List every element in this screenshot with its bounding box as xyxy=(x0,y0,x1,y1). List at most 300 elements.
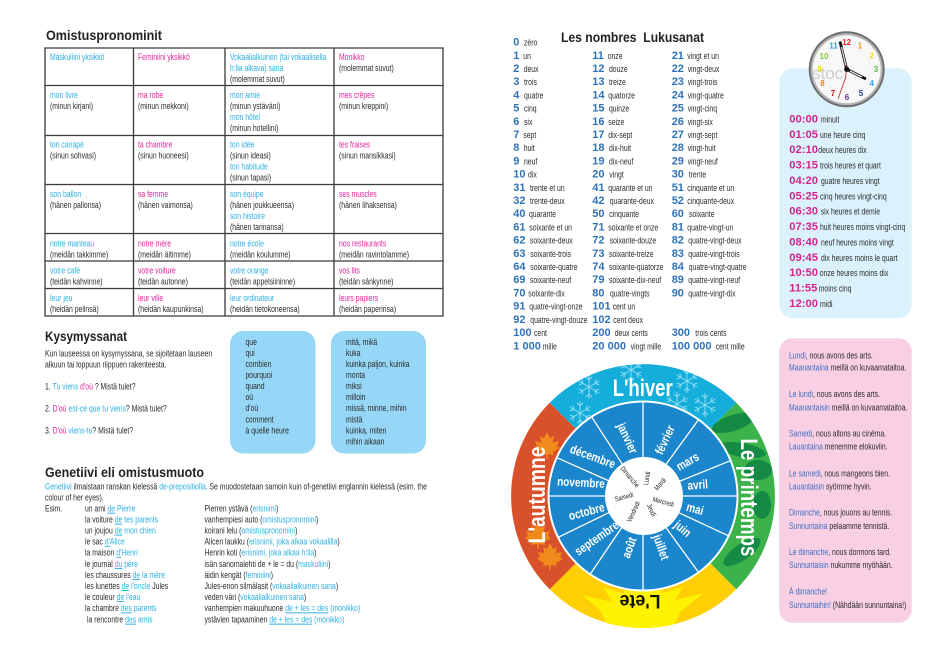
numbers column 2: 13 xyxy=(592,76,605,88)
list: French genitive examples: le couleur de l'eau xyxy=(85,591,141,602)
numbers column 3: 30 xyxy=(672,169,684,181)
table row: leur: leur jeu xyxy=(50,292,73,303)
panel: clock times: 00:00 xyxy=(789,114,818,126)
panel: Finnish question words: kuka xyxy=(346,347,361,358)
panel: clock times: 07:35 xyxy=(789,221,818,233)
numbers column 2: dix-huit xyxy=(609,142,632,154)
numbers column 3: quatre-vingt-trois xyxy=(688,248,740,259)
panel: clock times: 12:00 xyxy=(789,298,818,310)
panel: weekday sentences: Sunnuntaisin nukumme myöhään. xyxy=(789,559,893,570)
table row: votre: (teidän sänkynne) xyxy=(339,275,394,287)
numbers column 3: 28 xyxy=(672,142,684,154)
table row: son: (hänen lihaksensa) xyxy=(339,199,397,210)
numbers column 3: soixante xyxy=(689,208,715,220)
numbers column 3: quatre-vingt-quatre xyxy=(689,261,747,272)
panel: Finnish question words: mistä xyxy=(346,413,363,425)
numbers column 3: 100 000 xyxy=(672,340,711,352)
table row: votre: votre voiture xyxy=(138,264,176,276)
panel: weekday sentences: Maanantaisin meillä on kuvaamataitoa. xyxy=(789,401,907,413)
numbers column 3: vingt-cinq xyxy=(688,102,717,114)
numbers column 1: dix xyxy=(528,168,537,180)
table row: mon: (minun ystäväni) xyxy=(230,100,280,111)
segment: autumn xyxy=(511,402,576,590)
weekday hub: Mercredi xyxy=(652,496,675,509)
panel: clock times: deux heures dix xyxy=(818,144,867,156)
list: Finnish genitive translations: ystävien tapaaminen de + les = des (monikko) xyxy=(204,613,344,625)
text block: genitive explanation: Esim. xyxy=(45,502,62,514)
numbers column 1: 91 xyxy=(513,301,526,313)
list: Finnish genitive translations: äidin kengät (feminiini) xyxy=(204,569,273,580)
table row: notre: (meidän koulumme) xyxy=(230,248,291,260)
numbers column 2: 19 xyxy=(592,155,605,167)
icon: wall clock: 12 xyxy=(842,38,852,47)
table header row: h:lla alkava) sana xyxy=(230,62,284,73)
numbers column 1: 70 xyxy=(513,287,526,299)
numbers column 3: 24 xyxy=(672,89,685,101)
icon: wall clock xyxy=(809,31,885,107)
numbers column 1: zéro xyxy=(524,36,538,48)
panel: clock times: 02:10 xyxy=(789,144,818,156)
list: Finnish genitive translations: vanhempiesi auto (omistuspronomini) xyxy=(204,513,319,525)
table row: mon: mon livre xyxy=(50,89,78,100)
panel: clock times: 01:05 xyxy=(789,129,818,141)
numbers column 3: quatre-vingt-dix xyxy=(688,287,736,299)
weekday hub: Mardi xyxy=(653,477,668,492)
numbers column 2: quarante et un xyxy=(608,182,653,193)
panel: French question words: où xyxy=(246,391,253,403)
numbers column 2: 200 xyxy=(592,327,611,339)
table row: mon: (minun kreppini) xyxy=(339,100,388,111)
list: French genitive examples: les chaussures de la mère xyxy=(85,569,165,580)
numbers column 2: 18 xyxy=(592,142,605,154)
table grid xyxy=(45,48,443,316)
numbers column 1: neuf xyxy=(524,155,538,167)
panel: clock times: midi xyxy=(820,298,833,309)
segment: summer: L'ete xyxy=(620,590,660,611)
numbers column 1: 92 xyxy=(513,314,526,326)
numbers column 3: vingt-six xyxy=(688,116,714,127)
numbers column 2: quatre-vingts xyxy=(610,287,650,299)
numbers column 3: cent mille xyxy=(716,340,745,352)
numbers column 2: dix-sept xyxy=(608,129,633,140)
numbers column 1: quatre-vingt-onze xyxy=(529,300,583,312)
numbers column 3: 300 xyxy=(672,327,690,339)
text block: question word explanation: 2. D'où est-ce que tu viens? Mistä tulet? xyxy=(45,402,167,414)
table row: mon: (minun hotellini) xyxy=(230,122,279,133)
table row: ton: ta chambre xyxy=(138,138,173,150)
weekday hub: Samedi xyxy=(614,491,634,504)
table row: votre: (teidän appelsiininne) xyxy=(230,275,295,287)
table header row: Monikko xyxy=(339,51,365,62)
icon: wall clock: 5 xyxy=(859,89,864,98)
table row: leur: (heidän paperinsa) xyxy=(339,303,396,314)
panel: Finnish question words: milloin xyxy=(346,391,366,403)
table row: ton: (sinun tapasi) xyxy=(230,171,271,183)
numbers column 2: dix-neuf xyxy=(609,155,634,167)
table row: leur: (heidän kaupunkinsa) xyxy=(138,303,204,314)
numbers column 1: 61 xyxy=(513,221,526,233)
segment: summer xyxy=(550,564,736,628)
numbers column 1: 5 xyxy=(513,103,519,115)
heading: Les nombres Lukusanat: Les nombres Lukusanat xyxy=(561,29,704,45)
table row: mon: mon amie xyxy=(230,89,260,100)
numbers column 2: 16 xyxy=(592,116,605,128)
numbers column 2 xyxy=(592,50,664,352)
numbers column 2: vingt mille xyxy=(631,340,661,352)
panel: weekday sentences: À dimanche! xyxy=(789,585,827,597)
numbers column 1: 9 xyxy=(513,155,519,167)
panel: French question words: quand xyxy=(246,380,265,392)
list: Finnish genitive translations: Henrin koti (erisnimi, joka alkaa h:lla) xyxy=(204,546,317,558)
table: possessive pronouns xyxy=(45,48,443,316)
table row: notre: (meidän ravintolamme) xyxy=(339,248,409,260)
segment: spring: Le printemps xyxy=(735,438,762,556)
numbers column 3: 81 xyxy=(672,221,684,233)
panel: French question words: combien xyxy=(246,358,272,369)
month labels: août xyxy=(620,536,640,560)
panel: clock times: minuit xyxy=(821,113,840,125)
numbers column 3: 23 xyxy=(672,76,684,88)
numbers column 1: deux xyxy=(524,63,539,74)
table row: notre: (meidän äitimme) xyxy=(138,248,191,260)
table row: notre: (meidän takkimme) xyxy=(50,248,108,260)
text block: question word explanation: Kun lauseessa on kysymyssana, se sijoitetaan lauseen xyxy=(45,347,212,359)
numbers column 1: 0 xyxy=(513,36,519,48)
numbers column 2: 102 xyxy=(592,314,611,326)
numbers column 2: cinquante xyxy=(609,208,639,220)
panel: Finnish question words: mihin aikaan xyxy=(346,435,385,447)
table row: ton: ton canapé xyxy=(50,138,84,150)
weekday hub: Vendredi xyxy=(626,500,642,524)
panel: weekday sentences: Dimanche, nous jouons au tennis. xyxy=(789,506,892,518)
numbers column 3 xyxy=(672,50,747,352)
list: French genitive examples: la maison d'Henri xyxy=(85,546,138,558)
table row: son: (hänen vaimonsa) xyxy=(138,199,193,210)
panel: clock times: une heure cinq xyxy=(820,129,866,140)
month ring xyxy=(548,400,738,592)
list: Finnish genitive translations: Pierren ystävä (erisnimi) xyxy=(204,502,279,514)
table header row: Maskuliini yksikkö xyxy=(50,51,105,62)
numbers column 3: 27 xyxy=(672,129,684,141)
numbers column 1: 69 xyxy=(513,274,526,286)
panel: weekday sentences: Maanantaina meillä on kuvaamataitoa. xyxy=(789,361,906,373)
numbers column 3: vingt-sept xyxy=(688,129,718,140)
month labels: juillet xyxy=(649,532,671,562)
panel: clock times: moins cinq xyxy=(819,282,852,294)
numbers column 2: quarante-deux xyxy=(610,195,655,206)
list: French genitive examples: la rencontre des amis xyxy=(87,613,153,625)
list: Finnish genitive translations: veden väri (vokaalialkuinen sana) xyxy=(204,591,306,602)
table row: son: son ballon xyxy=(50,188,82,199)
heading: Genetiivi eli omistusmuoto: Genetiivi eli omistusmuoto xyxy=(45,464,204,480)
numbers column 2: quatorze xyxy=(608,89,635,101)
table row: son: son équipe xyxy=(230,188,264,199)
weekday hub: Jeudi xyxy=(645,503,657,518)
panel: French question words: d'où xyxy=(246,402,259,414)
weekday hub xyxy=(605,457,683,535)
panel: clock times: trois heures et quart xyxy=(820,159,881,171)
numbers column 1: 64 xyxy=(513,261,526,273)
numbers column 3: 29 xyxy=(672,155,684,167)
icon: wall clock: 7 xyxy=(831,89,836,98)
numbers column 2: 71 xyxy=(592,221,605,233)
table header row: (molemmat suvut) xyxy=(230,73,285,84)
numbers column 3: cinquante et un xyxy=(687,182,734,193)
numbers column 1: soixante et un xyxy=(529,221,572,233)
numbers column 3: trente xyxy=(689,168,707,180)
list: French genitive examples: la voiture de tes parents xyxy=(85,513,158,525)
table row: leur: (heidän pelinsä) xyxy=(50,303,99,314)
numbers column 3: vingt-deux xyxy=(688,63,720,74)
icon: wall clock: 1 xyxy=(858,42,863,50)
numbers column 2: 80 xyxy=(592,287,605,299)
list: Finnish genitive translations: isän sanomalehti de + le = du (maskuliini) xyxy=(204,558,331,569)
month labels: décembre xyxy=(568,443,617,472)
table row: notre: notre mère xyxy=(138,237,171,249)
numbers column 3: vingt-quatre xyxy=(688,89,724,101)
month labels: novembre xyxy=(557,476,605,491)
icon: wall clock: 11 xyxy=(829,42,838,50)
numbers column 3: quatre-vingt-un xyxy=(687,221,734,233)
numbers column 2: 42 xyxy=(592,195,605,207)
table row: leur: leur ville xyxy=(138,292,163,303)
panel: clock times: neuf heures moins vingt xyxy=(821,236,894,248)
numbers column 1 xyxy=(513,36,588,352)
list: Finnish genitive translations: koirani lelu (omistuspronomini) xyxy=(204,524,298,536)
month labels: janvier xyxy=(613,420,640,456)
table row: son: (hänen tarinansa) xyxy=(230,221,284,232)
numbers column 1: 6 xyxy=(513,116,519,128)
numbers column 2: 73 xyxy=(592,248,605,260)
list: French genitive examples: un ami de Pierre xyxy=(85,502,136,514)
numbers column 1: 2 xyxy=(513,63,519,75)
panel: clock times: 04:20 xyxy=(789,175,818,187)
clock watermark: stoc xyxy=(812,64,844,83)
numbers column 2: 50 xyxy=(592,208,605,220)
numbers column 3: vingt-trois xyxy=(688,76,717,88)
table row: leur xyxy=(50,292,396,314)
numbers column 1: quarante xyxy=(529,208,556,220)
numbers column 1: 31 xyxy=(513,182,526,194)
numbers column 1: cinq xyxy=(524,102,537,114)
icon: wall clock: 3 xyxy=(874,65,879,74)
numbers column 1: 3 xyxy=(513,76,519,88)
numbers column 2: soixante et onze xyxy=(608,221,658,233)
text block: genitive explanation: Genetiivi ilmaistaan ranskan kielessä de-prepositiolla. Se muodostetaan samoin kuin of-genetiivi englannin kielessä (esim. the xyxy=(45,480,427,492)
numbers column 1: 8 xyxy=(513,142,519,154)
numbers column 1: 1 000 xyxy=(513,340,541,352)
list: Finnish genitive translations: Jules-enon silmälasit (vokaalialkuinen sana) xyxy=(204,580,338,591)
list: Finnish genitive translations: vanhempien makuuhuone de + les = des (monikko) xyxy=(204,602,360,614)
numbers column 3: 52 xyxy=(672,195,684,207)
panel: Finnish question words: missä, minne, mihin xyxy=(346,402,407,414)
icon: wall clock: 2 xyxy=(869,52,874,60)
text block: genitive explanation: colour of her eyes). xyxy=(45,491,104,503)
numbers column 1: soixante-deux xyxy=(530,234,573,246)
numbers column 2: 20 xyxy=(592,169,605,181)
panel: clock times xyxy=(779,68,912,318)
panel: clock times: cinq heures vingt-cinq xyxy=(820,190,887,202)
panel: clock times: guatre heures vingt xyxy=(821,175,880,186)
numbers column 1: 100 xyxy=(513,327,532,339)
numbers column 1: cent xyxy=(534,327,548,338)
panel: clock times: 11:55 xyxy=(789,282,817,294)
month labels: mars xyxy=(674,451,702,474)
weekday hub: Lundi xyxy=(643,471,653,486)
numbers column 1: 62 xyxy=(513,235,526,247)
segment: winter: L'hiver xyxy=(613,375,673,402)
numbers column 1: trente-deux xyxy=(530,195,565,206)
panel: French question words: pourquoi xyxy=(246,369,272,381)
numbers column 3: 22 xyxy=(672,63,684,75)
numbers column 2: soixante-douze xyxy=(610,234,656,246)
numbers column 1: soixante-neuf xyxy=(530,274,572,286)
numbers column 1: soixante-quatre xyxy=(530,261,578,272)
text block: question word explanation: 3. D'où viens-tu? Mistä tulet? xyxy=(45,424,133,436)
table row: ton: (sinun huoneesi) xyxy=(138,149,189,161)
numbers column 2: vingt xyxy=(609,168,624,180)
numbers column 1: soixante-dix xyxy=(528,287,566,299)
table header row: Feminiini yksikkö xyxy=(138,51,190,62)
panel: weekday sentences: Lauantaina menemme elokuviin. xyxy=(789,440,888,452)
heading: Kysymyssanat: Kysymyssanat xyxy=(45,328,127,344)
numbers column 3: 51 xyxy=(672,182,684,194)
text block: question word explanation xyxy=(45,347,212,436)
numbers column 3: 84 xyxy=(672,261,685,273)
table row: votre: votre café xyxy=(50,264,80,276)
table header row: (molemmat suvut) xyxy=(339,62,394,73)
panel: Finnish question words: kuinka paljon, kuinka xyxy=(346,358,410,369)
list: Finnish genitive translations xyxy=(204,502,360,625)
numbers column 2: cent deux xyxy=(613,314,644,325)
numbers column 2: soixante-quatorze xyxy=(609,261,664,272)
month labels: mai xyxy=(685,501,705,518)
table row: son: son histoire xyxy=(230,210,265,221)
panel: weekday sentences: Lauantaisin syömme hyvin. xyxy=(789,480,872,492)
numbers column 2: 17 xyxy=(592,129,605,141)
table row: ton: (sinun sohvasi) xyxy=(50,149,96,161)
table row: votre xyxy=(50,264,394,287)
table row: votre: (teidän autonne) xyxy=(138,275,188,287)
table row: mon: ma robe xyxy=(138,89,163,100)
panel: French question words: à quelle heure xyxy=(246,424,289,436)
numbers column 3: vingt-huit xyxy=(688,142,716,154)
month labels: octobre xyxy=(567,501,606,524)
numbers column 2: 41 xyxy=(592,182,605,194)
table row: ton: ton idée xyxy=(230,138,255,150)
numbers column 3: vingt-neuf xyxy=(688,155,718,167)
month labels xyxy=(557,420,709,562)
list: French genitive examples: un joujou de mon chien xyxy=(85,524,156,536)
table row: notre: nos restaurants xyxy=(339,237,386,249)
month labels: juin xyxy=(670,518,693,540)
panel: clock times: 09:45 xyxy=(789,252,818,264)
numbers column 2: seize xyxy=(608,116,625,127)
table row: mon: (minun mekkoni) xyxy=(138,100,189,111)
numbers column 3: quatre-vingt-deux xyxy=(688,234,742,246)
numbers column 1: 63 xyxy=(513,248,526,260)
month labels: avril xyxy=(687,478,709,493)
table row: ton xyxy=(50,138,396,183)
list: French genitive examples: les lunettes de l'oncle Jules xyxy=(85,580,168,591)
table row: ton: ton habitude xyxy=(230,160,268,172)
chart: seasons and months wheel xyxy=(511,358,775,630)
panel: French question words: qui xyxy=(246,347,255,358)
panel: Finnish question words: miksi xyxy=(346,380,362,392)
numbers column 2: deux cents xyxy=(615,327,648,338)
numbers column 2: soixante-dix-neuf xyxy=(609,274,662,286)
icon: wall clock: 9 xyxy=(817,65,822,74)
numbers column 2: 74 xyxy=(592,261,605,273)
numbers column 3: trois cents xyxy=(695,327,727,338)
numbers column 3: 82 xyxy=(672,235,684,247)
numbers column 2: 72 xyxy=(592,235,605,247)
numbers column 1: sept xyxy=(523,129,537,140)
numbers column 3: 89 xyxy=(672,274,684,286)
table row: notre: notre manteau xyxy=(50,237,94,249)
numbers column 1: un xyxy=(523,50,531,61)
table row: leur: leur ordinateur xyxy=(230,292,274,303)
panel: clock times: 08:40 xyxy=(789,236,818,248)
table row: mon: mes crêpes xyxy=(339,89,374,100)
table row: leur: leurs papiers xyxy=(339,292,378,303)
numbers column 3: vingt et un xyxy=(687,50,719,61)
icon: wall clock: 6 xyxy=(845,93,850,102)
panel: weekday sentences: Le dimanche, nous dormons tard. xyxy=(789,546,891,557)
numbers column 2: 79 xyxy=(592,274,605,286)
panel: French question words: comment xyxy=(246,413,274,425)
icon: wall clock: 4 xyxy=(869,79,874,88)
panel: clock times: 06:30 xyxy=(789,206,818,218)
panel: clock times: 03:15 xyxy=(789,160,818,172)
numbers column 3: cinquante-deux xyxy=(687,195,735,206)
numbers column 3: 21 xyxy=(672,50,684,62)
table row: votre: vos lits xyxy=(339,264,360,276)
segment: autumn: L'autumne xyxy=(524,446,551,544)
text block: question word explanation: alkuun tai loppuun riippuen rakenteesta. xyxy=(45,358,166,370)
table row: votre: (teidän kahvinne) xyxy=(50,275,103,287)
numbers column 1: quatre xyxy=(524,89,544,101)
panel: clock times: six heures et demie xyxy=(821,205,880,217)
numbers column 1: soixante-trois xyxy=(530,248,571,259)
numbers column 3: 26 xyxy=(672,116,684,128)
table row: leur: (heidän tietokoneensa) xyxy=(230,303,300,314)
numbers column 3: 90 xyxy=(672,287,684,299)
heading: Omistuspronominit: Omistuspronominit xyxy=(46,27,162,43)
table row: son: ses muscles xyxy=(339,188,377,199)
numbers column 2: soixante-treize xyxy=(609,248,654,259)
numbers column 2: onze xyxy=(608,50,623,61)
panel: clock times: onze heures moins dix xyxy=(820,267,889,278)
panel: Finnish question words: monta xyxy=(346,369,365,381)
text block: question word explanation: 1. Tu viens d'où ? Mistä tulet? xyxy=(45,380,136,392)
numbers column 2: quinze xyxy=(609,102,629,114)
table row: notre xyxy=(50,237,409,260)
panel: Finnish question words xyxy=(331,331,426,454)
panel: French question words xyxy=(230,331,316,454)
numbers column 1: 4 xyxy=(513,89,520,101)
list: French genitive examples: la chambre des parents xyxy=(85,602,157,614)
panel: clock times: huit heures moins vingt-cinq xyxy=(820,221,906,232)
table row: ton: (sinun ideasi) xyxy=(230,149,271,161)
numbers column 2: 101 xyxy=(592,301,611,313)
table row: notre: notre école xyxy=(230,237,264,249)
table row: mon xyxy=(50,89,388,133)
numbers column 3: quatre-vingt-neuf xyxy=(688,274,741,286)
panel: weekday sentences: Le samedi, nous mangeons bien. xyxy=(789,467,890,479)
numbers column 1: 1 xyxy=(513,50,519,62)
panel: weekday sentences: Le lundi, nous avons des arts. xyxy=(789,388,880,399)
